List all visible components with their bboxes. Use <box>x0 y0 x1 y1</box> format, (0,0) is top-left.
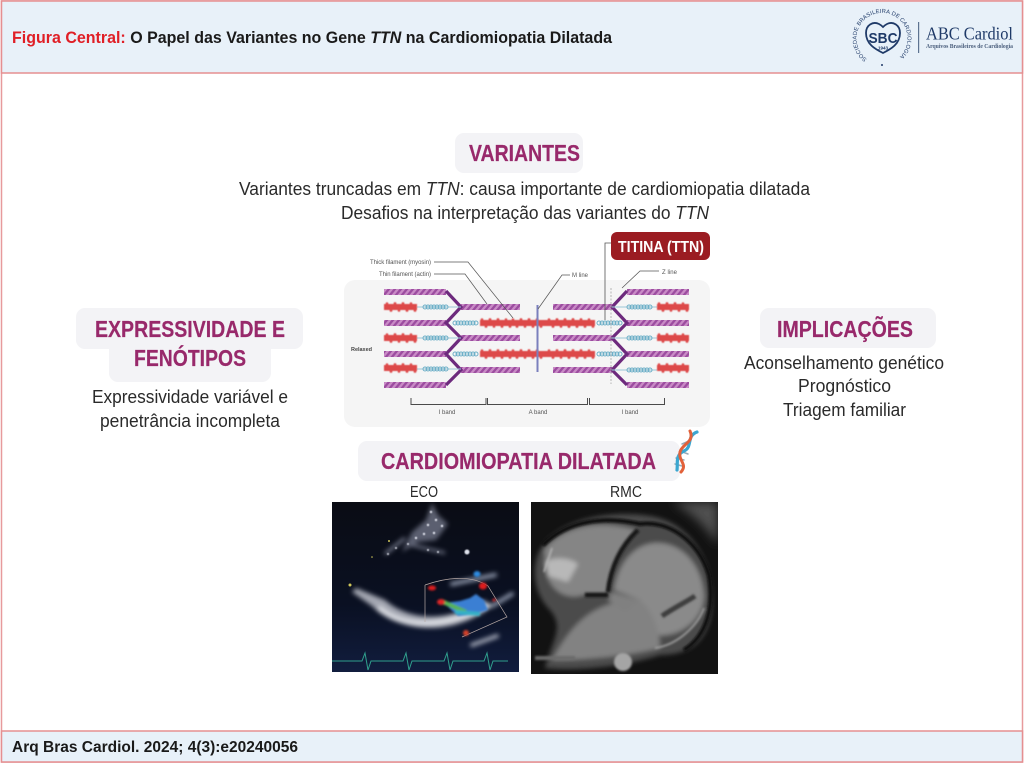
citation: Arq Bras Cardiol. 2024; 4(3):e20240056 <box>12 739 298 756</box>
heading: expressividade e fenótipos: FENÓTIPOS <box>134 344 246 371</box>
label: rmc: RMC <box>610 484 642 501</box>
logo: ABC Cardiol: Arquivos Brasileiros de Cardiologia <box>926 43 1014 50</box>
heading: expressividade e fenótipos <box>76 308 303 382</box>
myosin filaments <box>384 302 689 373</box>
text block: variantes <box>239 179 811 223</box>
footer band <box>2 731 1022 762</box>
diagram: sarcomere <box>344 260 710 427</box>
text block: implicações: Aconselhamento genético <box>744 353 944 373</box>
callout: titina <box>605 232 710 320</box>
titin connectors and coils <box>417 305 657 372</box>
heading: implicações <box>760 308 936 348</box>
Z-disc zigzags <box>446 291 627 385</box>
filament callouts: Thin filament (actin) <box>379 272 431 278</box>
logo: SBC seal: SOCIEDADE BRASILEIRA DE CARDIOLOGIA <box>852 8 912 62</box>
filament callouts <box>370 260 678 279</box>
logo: ABC Cardiol: ABC Cardiol <box>926 24 1013 44</box>
heading: variantes: VARIANTES <box>469 140 580 166</box>
thin filaments <box>384 289 689 388</box>
title: Figura Central: O Papel das Variantes no Gene TTN na Cardiomiopatia Dilatada <box>12 28 613 47</box>
logo: SBC seal: 1943 <box>878 46 889 50</box>
text block: implicações <box>744 353 944 420</box>
heading: cardiomiopatia dilatada <box>358 441 680 481</box>
image: echocardiogram <box>332 502 519 672</box>
heading: variantes <box>455 133 583 173</box>
diagram: sarcomere: A band <box>529 410 547 416</box>
label: eco: ECO <box>410 484 438 501</box>
band brackets <box>411 398 664 404</box>
logo: SBC seal: SBC <box>868 30 898 47</box>
Z line <box>610 288 612 384</box>
text block: variantes: Desafios na interpretação das variantes do TTN <box>341 203 710 223</box>
text block: variantes: Variantes truncadas em TTN: causa importante de cardiomiopatia dilatada <box>239 179 811 199</box>
text block: expressividade: Expressividade variável e <box>92 387 288 407</box>
heading: implicações: IMPLICAÇÕES <box>777 315 913 342</box>
relaxed label: Relaxed <box>351 347 372 353</box>
icon: dna helix <box>675 431 697 472</box>
filament callouts: M line <box>572 273 589 279</box>
header band <box>2 1 1022 73</box>
heading: cardiomiopatia dilatada: CARDIOMIOPATIA DILATADA <box>381 448 656 474</box>
text block: implicações: Triagem familiar <box>783 400 906 420</box>
text block: expressividade: penetrância incompleta <box>100 411 281 431</box>
callout: titina: TITINA (TTN) <box>618 239 704 256</box>
diagram: sarcomere: I band <box>439 410 455 416</box>
filament callouts: Thick filament (myosin) <box>370 260 431 266</box>
text block: implicações: Prognóstico <box>798 376 891 396</box>
text block: expressividade <box>92 387 288 431</box>
image: cardiac MRI <box>531 502 718 674</box>
filament callouts: Z line <box>662 270 678 276</box>
diagram: sarcomere: I band <box>622 410 638 416</box>
logo: ABC Cardiol <box>918 22 1014 53</box>
M line <box>536 305 538 372</box>
heading: expressividade e fenótipos: EXPRESSIVIDADE E <box>95 316 285 342</box>
